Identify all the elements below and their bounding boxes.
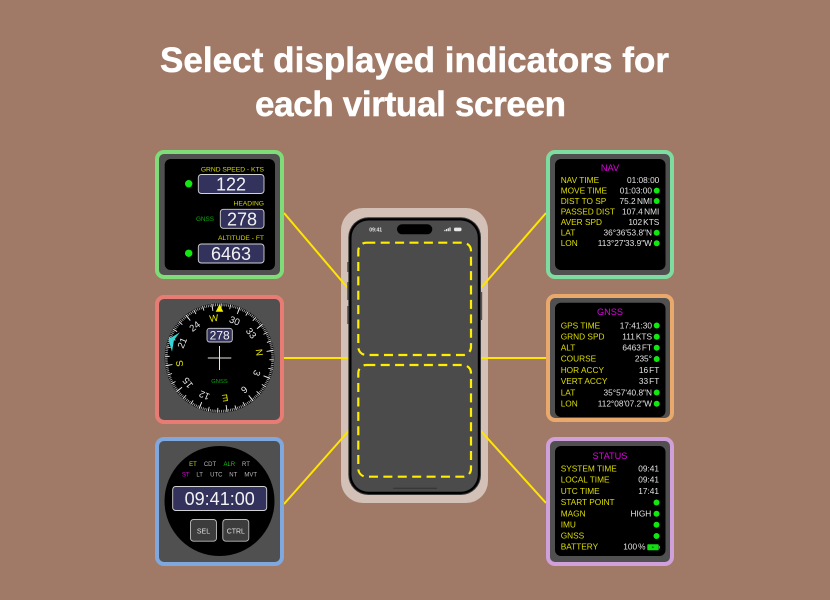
NAV labels: LAT (561, 228, 575, 238)
GNSS values: 235° (635, 354, 652, 364)
compass dial labels: 33 (243, 326, 258, 341)
STATUS labels: IMU (561, 519, 576, 529)
virtual screen slot: bottom (358, 365, 471, 477)
compass dial labels: 3 (250, 368, 262, 377)
NAV labels: LON (561, 238, 578, 248)
STATUS values: 09:41 (638, 475, 659, 485)
NAV labels: PASSED DIST (561, 206, 615, 216)
STATUS labels: BATTERY (561, 542, 599, 552)
centre cross (208, 346, 231, 370)
GNSS labels: LAT (561, 387, 575, 397)
GNSS labels: VERT ACCY (561, 376, 608, 386)
ground speed readout (185, 166, 265, 195)
NAV values: 107.4NMI (622, 206, 659, 216)
STATUS labels: UTC TIME (561, 486, 600, 496)
NAV values: 75.2NMI (620, 196, 652, 206)
STATUS values (623, 463, 659, 552)
timer mode labels: ST (182, 472, 190, 478)
STATUS values: 100% (623, 542, 646, 552)
GNSS labels: GRND SPD (561, 331, 605, 341)
STATUS heading: STATUS (593, 451, 627, 461)
heading box: 278 (210, 329, 230, 343)
GNSS values: 33FT (639, 376, 659, 386)
time readout: 09:41:00 (185, 489, 255, 509)
timer mode labels (182, 462, 257, 478)
compass dial labels: 12 (198, 388, 212, 402)
NAV values: 36°36'53.8"N (604, 228, 652, 238)
GNSS heading: GNSS (597, 307, 623, 317)
virtual screen slot: top (358, 243, 471, 355)
STATUS dots (654, 500, 660, 539)
timer mode labels: RT (242, 462, 250, 468)
STATUS labels: LOCAL TIME (561, 475, 610, 485)
compass ticks (159, 298, 280, 418)
status bar icons (444, 227, 462, 231)
heading readout (196, 201, 264, 229)
heading readout: HEADING (234, 201, 264, 208)
STATUS values: HIGH (631, 508, 651, 518)
compass dial labels: 6 (238, 383, 249, 395)
timer mode labels: LT (196, 472, 203, 478)
battery icon (647, 544, 660, 550)
GNSS source label: GNSS (211, 379, 228, 385)
heading readout: 278 (227, 209, 257, 229)
status bar time: 09:41 (369, 228, 382, 234)
ground speed readout: 122 (216, 175, 246, 195)
timer mode labels: UTC (210, 472, 223, 478)
title (160, 41, 669, 124)
panel: speed heading altitude (157, 152, 282, 277)
NAV values (598, 175, 660, 248)
dynamic island (397, 224, 432, 234)
CTRL button: CTRL (227, 528, 245, 535)
GNSS labels: COURSE (561, 354, 597, 364)
panel: STATUS (548, 439, 672, 564)
STATUS labels: START POINT (561, 497, 615, 507)
STATUS labels (561, 463, 617, 552)
GNSS labels: ALT (561, 342, 575, 352)
title: Select displayed indicators for (160, 41, 669, 80)
NAV labels: NAV TIME (561, 175, 600, 185)
cyan heading bug (168, 332, 180, 352)
NAV heading: NAV (601, 163, 620, 173)
NAV labels: MOVE TIME (561, 186, 608, 196)
altitude readout: 6463 (211, 244, 251, 264)
connector lines (284, 213, 546, 504)
compass dial labels: 15 (181, 375, 196, 390)
NAV labels: AVER SPD (561, 217, 602, 227)
GNSS labels: GPS TIME (561, 320, 601, 330)
SEL button: SEL (197, 528, 210, 535)
compass dial labels: 24 (188, 319, 203, 334)
compass dial labels (174, 313, 265, 403)
compass dial labels: 30 (227, 314, 241, 328)
GNSS status dots (654, 322, 660, 407)
timer mode labels: MVT (244, 472, 257, 478)
GNSS labels: HOR ACCY (561, 365, 605, 375)
GNSS values: 111KTS (622, 331, 652, 341)
NAV values: 113°27'33.9"W (598, 238, 652, 248)
timer mode labels: ALR (223, 462, 236, 468)
compass dial labels: 21 (176, 336, 190, 350)
NAV status dots (654, 188, 660, 246)
GNSS values: 16FT (639, 365, 659, 375)
panel: compass (157, 297, 282, 422)
STATUS values: 17:41 (638, 486, 659, 496)
timer mode labels: ET (189, 462, 197, 468)
phone backing mat (341, 208, 488, 503)
phone mockup (347, 217, 482, 495)
STATUS labels: SYSTEM TIME (561, 463, 617, 473)
timer mode labels: CDT (204, 462, 216, 468)
NAV labels (561, 175, 615, 248)
GNSS labels: LON (561, 399, 578, 409)
home indicator (393, 488, 437, 489)
altitude readout (185, 235, 264, 264)
panel: NAV (548, 152, 672, 277)
STATUS labels: MAGN (561, 508, 586, 518)
NAV values: 01:03:00 (620, 186, 652, 196)
compass dial labels: E (221, 391, 229, 403)
GNSS values: 112°08'07.2"W (598, 399, 652, 409)
STATUS labels: GNSS (561, 531, 585, 541)
compass dial labels: N (253, 348, 265, 357)
altitude readout: ALTITUDE - FT (218, 235, 264, 242)
ground speed readout: GRND SPEED - KTS (201, 166, 265, 173)
panel: timer (157, 439, 282, 564)
GNSS values (598, 320, 659, 409)
GNSS values: 6463FT (622, 342, 652, 352)
compass dial labels: W (209, 313, 219, 325)
title: each virtual screen (255, 85, 566, 124)
heading readout: GNSS (196, 216, 214, 223)
NAV values: 102KTS (628, 217, 660, 227)
lubber triangle (216, 304, 223, 312)
compass dial labels: S (174, 360, 186, 367)
GNSS labels (561, 320, 608, 409)
STATUS values: 09:41 (638, 463, 659, 473)
NAV values: 01:08:00 (627, 175, 660, 185)
panel: GNSS (548, 296, 672, 420)
GNSS values: 17:41:30 (620, 320, 652, 330)
GNSS values: 35°57'40.8"N (604, 387, 652, 397)
NAV labels: DIST TO SP (561, 196, 607, 206)
timer mode labels: NT (229, 472, 238, 478)
